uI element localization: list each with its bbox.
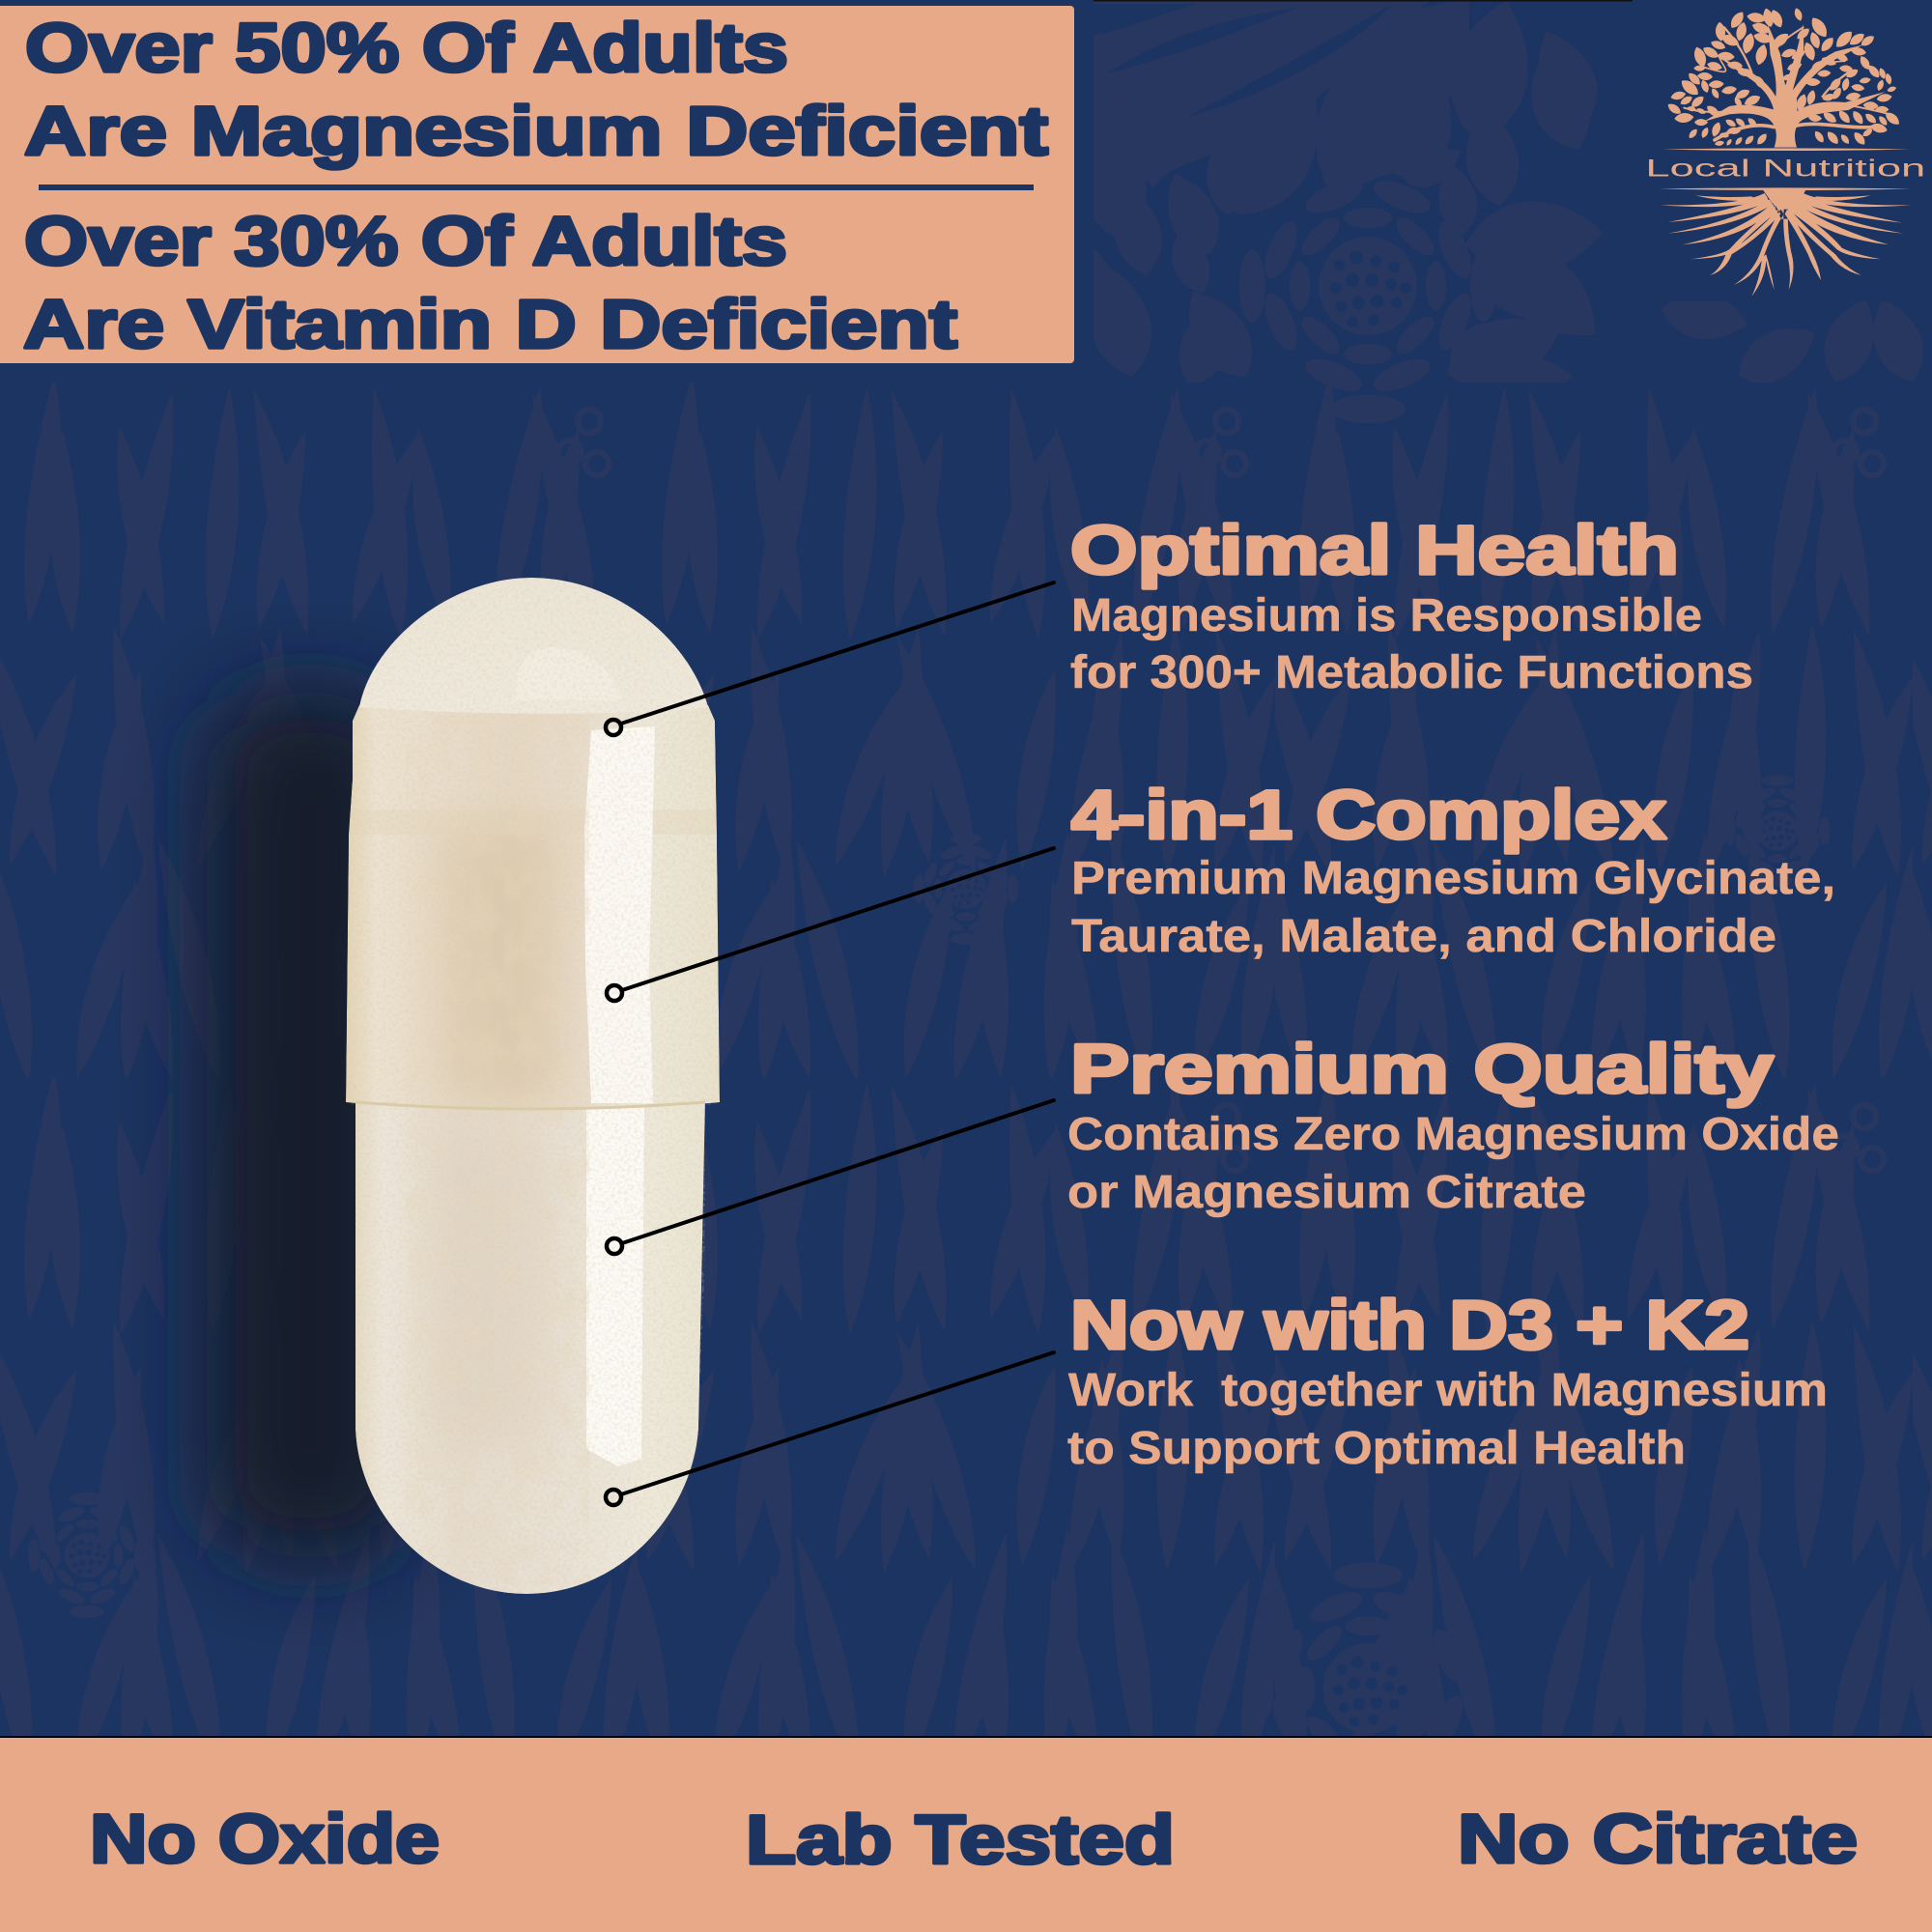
divider — [39, 185, 1034, 190]
benefit: premium quality — [1067, 1032, 1839, 1218]
callout pointer: premium quality — [607, 1100, 1054, 1254]
footer label: lab tested: Lab Tested — [746, 1803, 1175, 1879]
capsule dome highlight — [516, 647, 623, 700]
capsule shadow — [208, 691, 411, 1560]
capsule grain — [338, 570, 724, 1604]
capsule — [338, 570, 724, 1604]
benefit: now with d3 and k2 — [1067, 1288, 1828, 1474]
capsule powder tone lower — [433, 1141, 546, 1441]
benefit: premium quality: Contains Zero Magnesium Oxide — [1067, 1109, 1839, 1160]
benefit: 4-in-1 complex — [1071, 778, 1835, 962]
capsule powder tone — [435, 821, 560, 1101]
benefit: now with d3 and k2: Now with D3 + K2 — [1070, 1288, 1749, 1364]
callout pointer: d3 k2 — [606, 1352, 1054, 1505]
callout pointer: 4-in-1 complex — [607, 848, 1054, 1001]
logo roots — [1660, 190, 1911, 297]
benefit: optimal health — [1070, 513, 1753, 698]
capsule band detail — [348, 810, 720, 835]
benefit: optimal health: Optimal Health — [1070, 513, 1679, 589]
benefit: 4-in-1 complex: 4-in-1 Complex — [1071, 778, 1666, 854]
capsule seam shading — [355, 1102, 705, 1109]
capsule mottling — [406, 715, 589, 1584]
panel: deficiency statistics — [0, 6, 1074, 363]
footer label: no oxide: No Oxide — [90, 1802, 440, 1878]
benefit: 4-in-1 complex: Taurate, Malate, and Chloride — [1071, 911, 1776, 962]
heading: magnesium deficient: Are Magnesium Deficient — [24, 94, 1048, 170]
capsule cap highlight — [584, 726, 655, 1103]
capsule lower body — [355, 1096, 705, 1594]
capsule upper cap — [346, 705, 720, 1109]
footer label: no citrate: No Citrate — [1458, 1802, 1858, 1878]
benefit: optimal health: Magnesium is Responsible — [1071, 590, 1702, 641]
benefit: now with d3 and k2: to Support Optimal Health — [1067, 1423, 1686, 1474]
heading: vitamin d deficient: Are Vitamin D Deficient — [23, 287, 957, 363]
logo upper rule — [1662, 148, 1910, 151]
heading: over 30 percent: Over 30% Of Adults — [24, 204, 787, 280]
heading: over 50 percent: Over 50% Of Adults — [25, 11, 788, 87]
logo wordmark: Local Nutrition — [1645, 156, 1925, 183]
benefit: 4-in-1 complex: Premium Magnesium Glycinate, — [1071, 853, 1835, 904]
benefit: premium quality: or Magnesium Citrate — [1067, 1167, 1586, 1218]
capsule body highlight — [586, 1107, 644, 1466]
benefit: premium quality: Premium Quality — [1070, 1032, 1775, 1108]
logo: local nutrition tree — [1645, 7, 1925, 297]
callout pointer: optimal health — [606, 582, 1054, 735]
logo lower rule — [1659, 187, 1911, 190]
capsule dome — [359, 578, 708, 714]
footer band — [0, 1736, 1932, 1932]
benefit: optimal health: for 300+ Metabolic Functions — [1070, 647, 1753, 698]
benefit: now with d3 and k2: Work together with Magnesium — [1068, 1365, 1828, 1416]
